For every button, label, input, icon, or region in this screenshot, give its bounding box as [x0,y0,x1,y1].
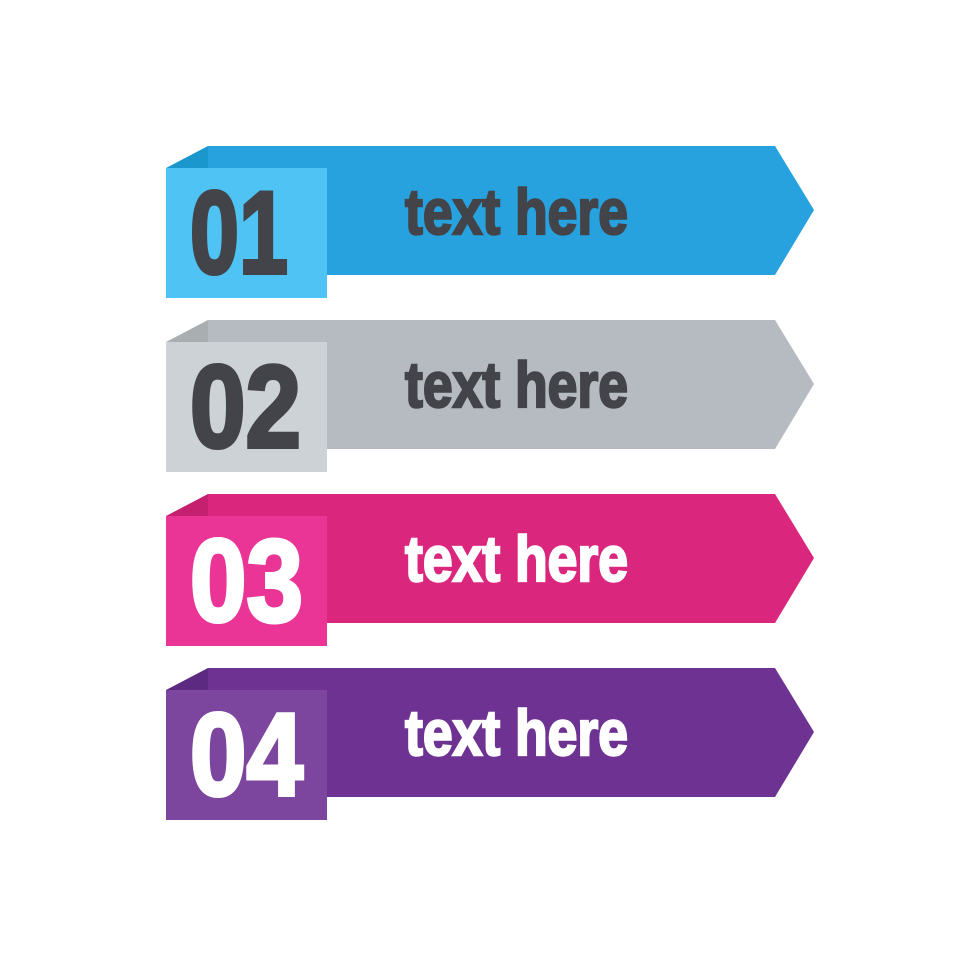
arrow bar 03 [208,494,814,623]
fold 02 [166,320,208,342]
number 02: 02 [190,341,301,472]
number 01: 01 [190,167,288,298]
number box 01 [166,168,327,298]
number box 04 [166,690,327,820]
banner 02 [166,320,814,472]
label 01: text here [405,176,628,248]
fold 03 [166,494,208,516]
banner 03 [166,494,814,646]
banner 01 [166,146,814,298]
number box 02 [166,342,327,472]
label 02: text here [405,349,628,421]
number 03: 03 [190,515,303,646]
arrow bar 02 [208,320,814,449]
label 04: text here [405,697,628,769]
label 03: text here [405,523,628,595]
banner 04 [166,668,814,820]
fold 04 [166,668,208,690]
arrow bar 04 [208,668,814,797]
arrow bar 01 [208,146,814,275]
fold 01 [166,146,208,168]
number box 03 [166,516,327,646]
number 04: 04 [190,689,303,820]
